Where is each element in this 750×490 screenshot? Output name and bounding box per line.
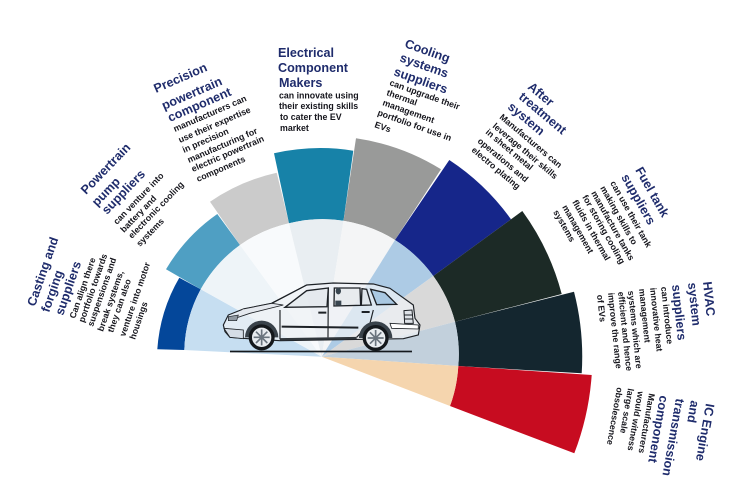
- heading: after treatment: system: [505, 100, 547, 138]
- description: cooling systems: management: [381, 97, 436, 125]
- description: casting and forging: venture into motor: [117, 260, 152, 338]
- description: HVAC: efficient and hence: [616, 291, 634, 372]
- description: IC engine: large scale: [618, 388, 636, 434]
- description: HVAC: of EVs: [595, 294, 608, 323]
- description: fuel tank: can use their tank: [608, 179, 654, 249]
- description: casting and forging: they can also: [105, 277, 133, 334]
- text block: precision powertrain component: [152, 60, 266, 184]
- description: after treatment: operations and: [476, 136, 530, 184]
- description: fuel tank: fluids in thermal: [570, 198, 612, 262]
- description: powertrain pump: [111, 170, 186, 248]
- segment: casting and forging: [157, 278, 201, 350]
- heading: cooling systems: Cooling: [403, 37, 452, 66]
- description: fuel tank: making skills to: [598, 184, 640, 247]
- text block: HVAC system suppliers: [595, 281, 718, 372]
- segment: HVAC: [455, 292, 582, 373]
- description: precision powertrain: in precision: [181, 126, 230, 155]
- description: precision powertrain: use their expertise: [177, 105, 252, 145]
- description: fuel tank: management: [560, 203, 596, 255]
- heading: casting and forging: suppliers: [53, 259, 84, 317]
- description: electrical component makers: to cater the EV: [280, 112, 342, 122]
- heading: electrical component makers: Component: [278, 61, 349, 75]
- heading: precision powertrain: Precision: [152, 60, 209, 96]
- inner semicircle wedges: [184, 219, 459, 406]
- description: electrical component makers: market: [280, 123, 309, 133]
- description: after treatment: leverage their skills: [491, 121, 560, 181]
- heading: after treatment: treatment: [516, 90, 570, 138]
- description: after treatment: [470, 112, 564, 191]
- heading: HVAC: suppliers: [669, 284, 689, 341]
- heading: electrical component makers: Electrical: [278, 46, 334, 60]
- heading: IC engine: [645, 394, 717, 477]
- heading: IC engine: component: [645, 394, 671, 465]
- description: precision powertrain: [172, 93, 266, 184]
- segment: cooling systems: [344, 138, 441, 240]
- description: IC engine: Manufacturers: [636, 393, 657, 454]
- heading: powertrain pump: pump: [89, 174, 123, 209]
- description: after treatment: Manufacturers can: [498, 112, 564, 170]
- text block: cooling systems suppliers: [373, 37, 462, 143]
- heading: electrical component makers: Makers: [279, 76, 322, 90]
- text block: IC engine and transmission component: [605, 387, 717, 477]
- text block: after treatment system: [470, 80, 570, 191]
- heading: cooling systems: [392, 37, 452, 97]
- icon: station wagon car: [223, 283, 420, 352]
- segment: fuel tank: [433, 211, 562, 322]
- text block: powertrain pump suppliers: [78, 141, 186, 248]
- description: HVAC: innovative heat: [648, 287, 665, 352]
- description: HVAC: improve the range: [606, 292, 624, 369]
- heading: cooling systems: suppliers: [392, 65, 449, 97]
- description: electrical component makers: [279, 90, 359, 133]
- segment: powertrain pump: [166, 214, 240, 289]
- description: fuel tank: [551, 179, 654, 266]
- description: cooling systems: EVs: [373, 119, 392, 134]
- description: cooling systems: thermal: [385, 87, 419, 108]
- heading: fuel tank: suppliers: [618, 172, 658, 227]
- heading: electrical component makers: [278, 46, 349, 90]
- description: casting and forging: suspensions and: [85, 256, 118, 328]
- description: cooling systems: portfolio for use in: [376, 107, 453, 143]
- heading: precision powertrain: component: [166, 85, 234, 125]
- heading: powertrain pump: suppliers: [99, 167, 148, 217]
- heading: powertrain pump: Powertrain: [78, 141, 133, 197]
- heading: after treatment: [505, 80, 570, 138]
- description: HVAC: systems which are: [626, 290, 644, 369]
- description: fuel tank: for storing cooling: [580, 193, 627, 266]
- description: precision powertrain: manufacturers can: [172, 93, 248, 134]
- heading: HVAC: [669, 281, 718, 341]
- description: IC engine: [605, 387, 657, 454]
- segment: electrical component: [274, 148, 353, 223]
- description: powertrain pump: battery and: [118, 193, 158, 234]
- description: after treatment: in sheet metal: [484, 127, 535, 172]
- segment: after treatment: [395, 160, 511, 276]
- description: HVAC: management: [637, 288, 653, 343]
- description: casting and forging: break systems,: [95, 269, 126, 333]
- heading: after treatment: After: [525, 80, 557, 109]
- heading: IC engine: and: [684, 399, 702, 424]
- description: IC engine: obsolescence: [605, 387, 625, 446]
- description: fuel tank: systems: [551, 208, 577, 244]
- text block: electrical component makers: [278, 46, 359, 133]
- text block: fuel tank suppliers: [551, 165, 672, 266]
- heading: casting and forging: Casting and: [25, 235, 61, 308]
- heading: cooling systems: systems: [398, 51, 450, 81]
- heading: casting and forging: [25, 235, 84, 317]
- description: cooling systems: can upgrade their: [388, 77, 462, 112]
- segment: precision powertrain: [210, 173, 289, 245]
- segment: IC engine: [450, 366, 592, 453]
- heading: precision powertrain: [152, 60, 234, 125]
- heading: IC engine: IC Engine: [693, 402, 717, 462]
- heading: powertrain pump: [78, 141, 148, 217]
- description: precision powertrain: manufacturing for: [186, 125, 259, 165]
- heading: HVAC: HVAC: [700, 281, 718, 317]
- description: casting and forging: housings: [127, 300, 150, 341]
- description: precision powertrain: components: [195, 154, 247, 184]
- heading: IC engine: transmission: [659, 397, 687, 477]
- description: precision powertrain: electric powertrain: [190, 133, 266, 174]
- text block: casting and forging suppliers: [25, 235, 152, 341]
- description: after treatment: electro plating: [470, 145, 522, 191]
- description: IC engine: would witness: [626, 390, 646, 452]
- description: cooling systems: [373, 77, 462, 143]
- heading: HVAC: system: [685, 282, 703, 326]
- description: powertrain pump: can venture into: [111, 170, 166, 226]
- heading: fuel tank: [618, 165, 672, 227]
- description: powertrain pump: electronic cooling: [126, 179, 186, 240]
- heading: casting and forging: forging: [39, 268, 66, 314]
- description: fuel tank: manufacture tanks: [589, 189, 637, 262]
- description: electrical component makers: can innovate using: [279, 90, 359, 100]
- description: casting and forging: Can align there: [67, 256, 98, 320]
- heading: precision powertrain: powertrain: [160, 74, 224, 113]
- description: electrical component makers: their existing skills: [279, 101, 358, 111]
- description: HVAC: can introduce: [659, 286, 675, 345]
- heading: fuel tank: Fuel tank: [632, 165, 672, 220]
- description: casting and forging: [67, 252, 152, 341]
- description: casting and forging: portfolio towards: [76, 252, 109, 324]
- description: HVAC: [595, 286, 675, 372]
- description: powertrain pump: systems: [134, 216, 166, 248]
- fan chart: outer coloured segments: [157, 138, 592, 453]
